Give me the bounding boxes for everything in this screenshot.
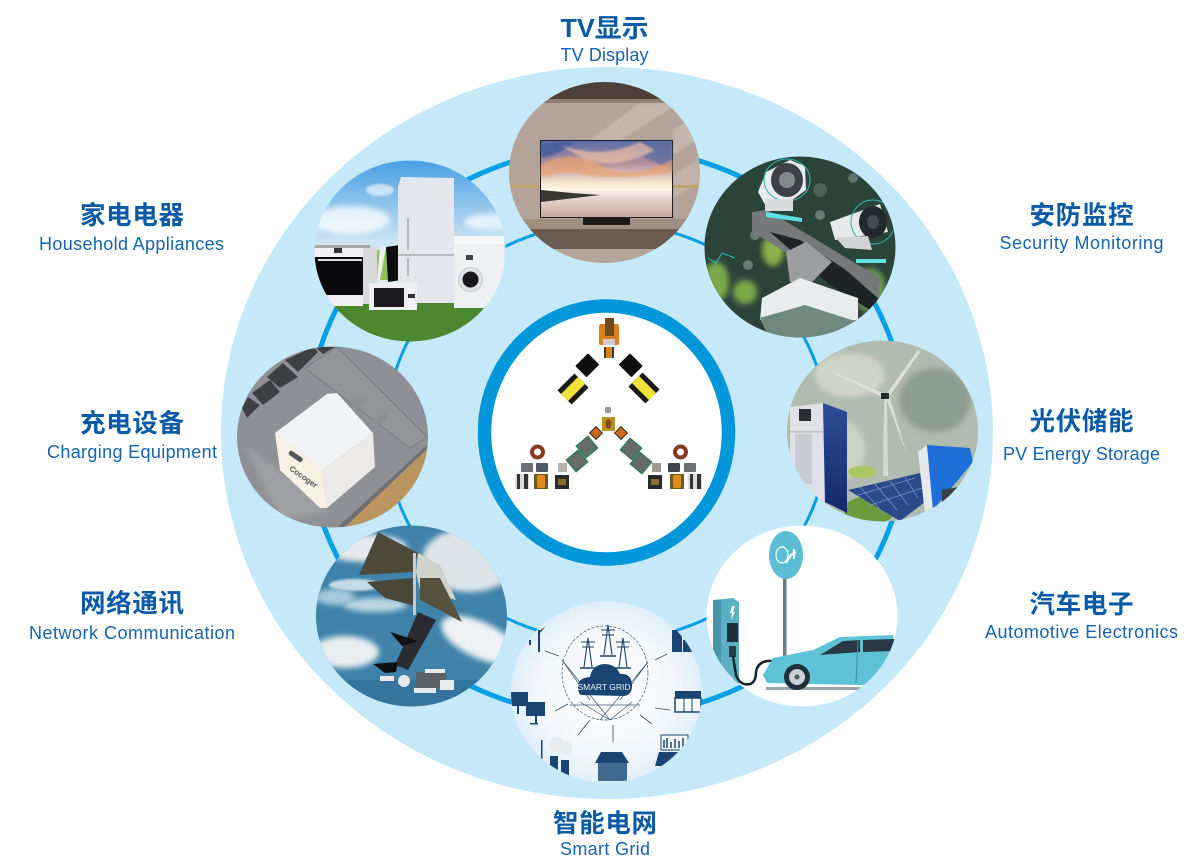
grid network globe	[562, 626, 648, 720]
television	[540, 140, 673, 225]
label: automotive electronics: Automotive Electronics	[985, 622, 1178, 642]
label: network communication: 网络通讯	[80, 590, 184, 618]
label: charging equipment: Charging Equipment	[47, 442, 217, 462]
photo: charging equipment	[232, 342, 432, 532]
photo: TV display	[505, 78, 705, 269]
centre circle: magnetic components	[484, 306, 728, 559]
label: smart grid: Smart Grid	[560, 839, 650, 859]
charger brand text: Cocoger	[288, 464, 319, 490]
arrows	[545, 651, 670, 742]
charging sign	[769, 531, 803, 656]
label: smart grid: 智能电网	[553, 810, 657, 838]
oven	[312, 246, 377, 306]
label: automotive electronics: 汽车电子	[1030, 591, 1134, 619]
trackpad outline	[305, 347, 427, 448]
label: TV display	[560, 15, 648, 65]
label: PV energy storage: PV Energy Storage	[1003, 444, 1160, 464]
label: TV display: TV Display	[560, 45, 648, 65]
component cluster: left group	[515, 446, 569, 489]
label: smart grid	[553, 810, 657, 859]
label: charging equipment: 充电设备	[80, 410, 184, 438]
transmission towers	[580, 625, 631, 668]
wind turbine	[834, 350, 920, 476]
smart grid cloud	[577, 664, 632, 696]
label: TV display: TV显示	[560, 15, 648, 43]
icon: factory	[541, 737, 572, 776]
icon: store	[675, 691, 701, 712]
refrigerator	[398, 177, 454, 303]
icon: office building	[672, 630, 693, 652]
satellite body	[373, 612, 454, 693]
smart grid cloud: SMART GRID	[577, 682, 631, 692]
icon: house	[595, 752, 629, 781]
electric car	[763, 635, 901, 690]
microwave	[369, 283, 417, 310]
USB charger	[275, 393, 387, 508]
label: security monitoring: 安防监控	[1030, 202, 1134, 230]
storage cabinet	[790, 403, 847, 513]
photo: household appliances	[314, 160, 506, 342]
mounting bracket	[752, 210, 880, 310]
label: PV energy storage	[1003, 408, 1160, 464]
solar panel	[848, 473, 925, 521]
photo: network communication satellite	[316, 526, 507, 706]
washing machine	[454, 236, 504, 308]
label: security monitoring: Security Monitoring	[1000, 233, 1164, 253]
label: security monitoring	[1000, 202, 1164, 253]
keyboard keys	[242, 347, 335, 418]
label: automotive electronics	[985, 591, 1178, 642]
photo: automotive electronics	[706, 526, 898, 706]
outer connecting ring	[307, 147, 907, 717]
inverter	[918, 445, 973, 514]
icon: solar panels	[511, 692, 545, 724]
component cluster: right group	[648, 446, 702, 489]
icon: wind turbine	[529, 626, 546, 652]
satellite solar arrays	[359, 532, 462, 622]
charging cable	[733, 656, 772, 684]
inner connecting ring	[386, 223, 828, 641]
photo: smart grid	[507, 598, 707, 788]
label: household appliances: Household Appliances	[39, 234, 224, 254]
label: network communication	[29, 590, 235, 643]
background disc	[221, 67, 993, 799]
charging station	[713, 598, 739, 690]
label: charging equipment	[47, 410, 217, 462]
component cluster: top chevron	[557, 318, 660, 405]
camera 2	[830, 200, 895, 250]
component cluster: lower chevron	[566, 407, 652, 474]
label: household appliances: 家电电器	[80, 202, 184, 230]
label: household appliances	[39, 202, 224, 254]
icon: laptop chart	[655, 735, 688, 766]
photo: PV energy storage	[782, 336, 982, 526]
photo: security cameras	[704, 156, 896, 338]
label: network communication: Network Communication	[29, 623, 235, 643]
label: PV energy storage: 光伏储能	[1030, 408, 1134, 436]
camera 1	[758, 159, 810, 211]
